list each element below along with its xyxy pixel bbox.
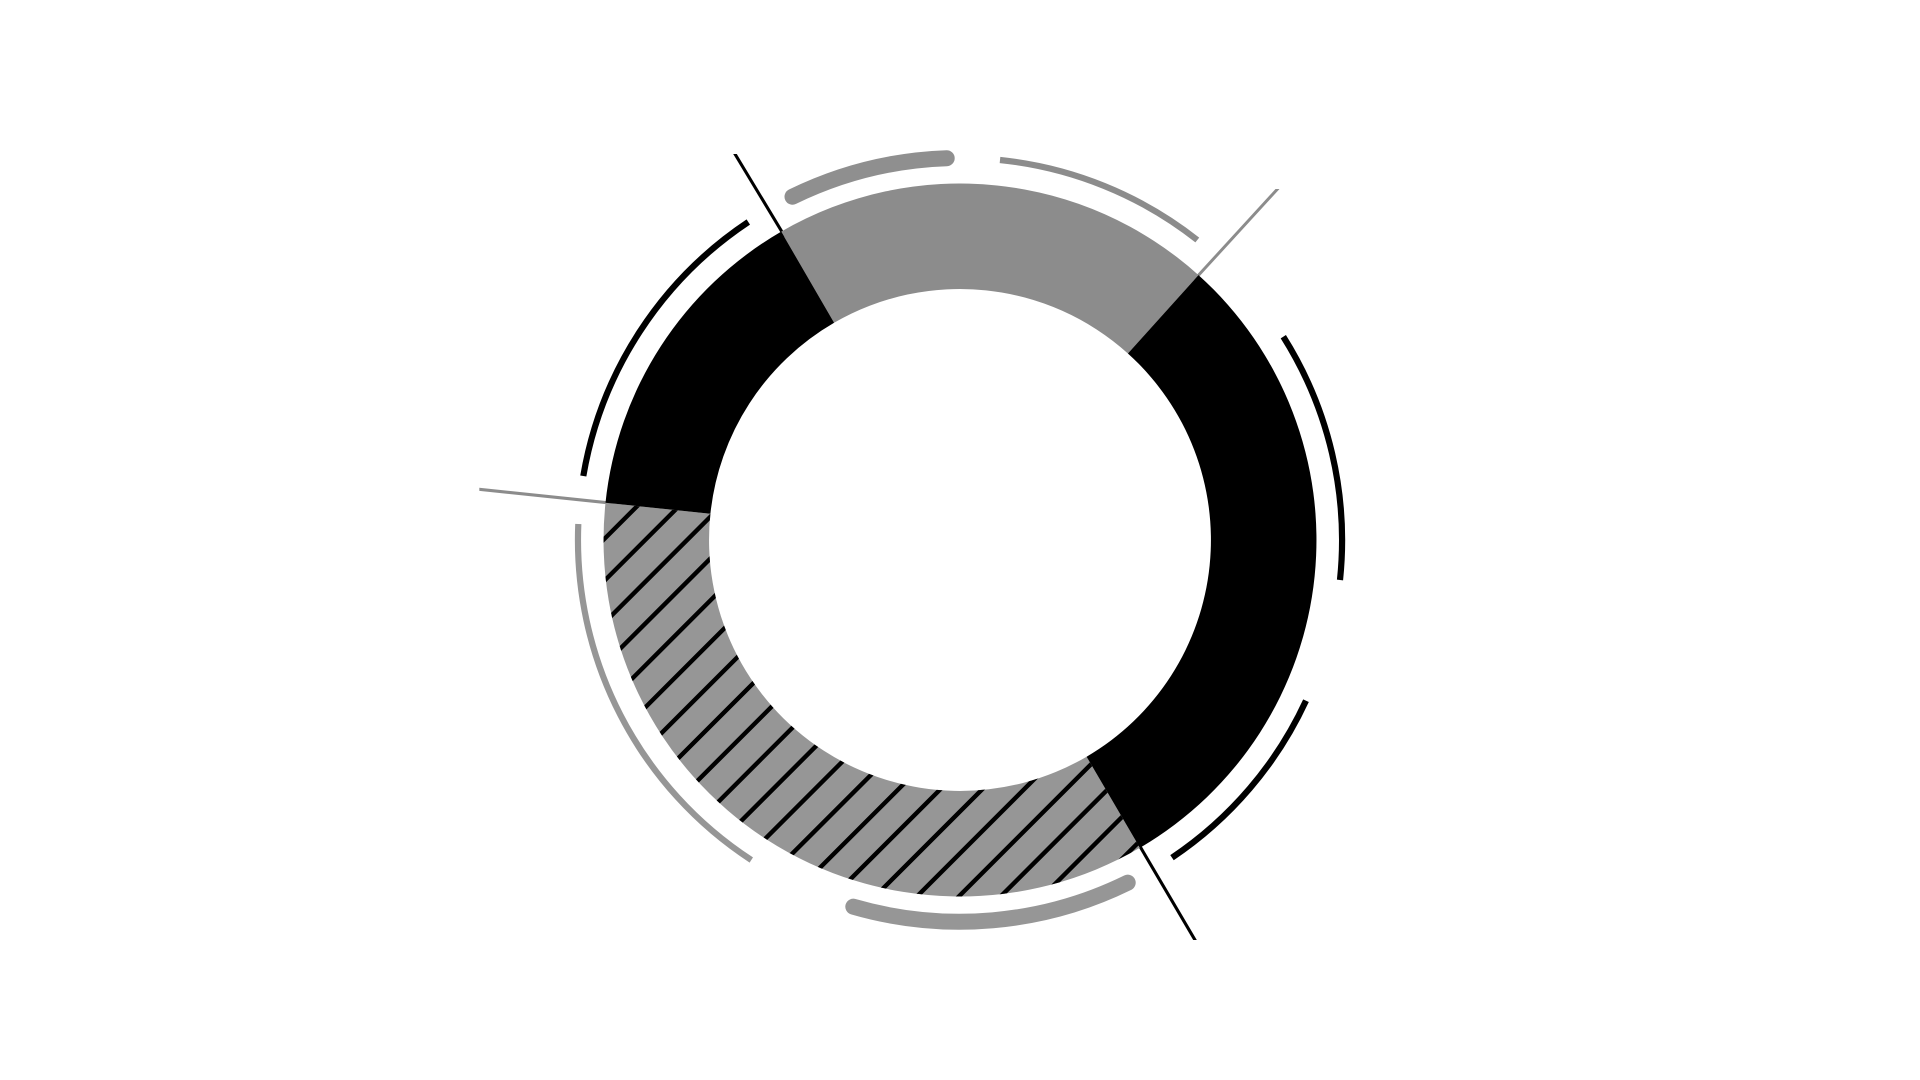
- outer arc: bottom thick grey: [853, 883, 1128, 922]
- leader line: top right: [1192, 189, 1280, 280]
- donut segment: left black: [606, 232, 834, 514]
- donut segment: right black: [1087, 275, 1316, 848]
- outer arc: upper left black: [583, 222, 748, 476]
- outer arc: lower right black: [1172, 701, 1306, 858]
- leader line: top left: [733, 154, 787, 237]
- leader line: left: [479, 488, 612, 505]
- outer arc: right black: [1283, 337, 1342, 580]
- leader line: bottom right: [1136, 843, 1197, 940]
- outer arc: top right thin grey: [1000, 160, 1197, 240]
- donut segment: top grey: [781, 184, 1198, 354]
- outer arc: top thick grey: [792, 158, 947, 197]
- outer arc: lower left thin grey: [578, 524, 751, 860]
- donut segment: bottom hatched: [604, 503, 1140, 896]
- donut chart infographic: [479, 150, 1346, 940]
